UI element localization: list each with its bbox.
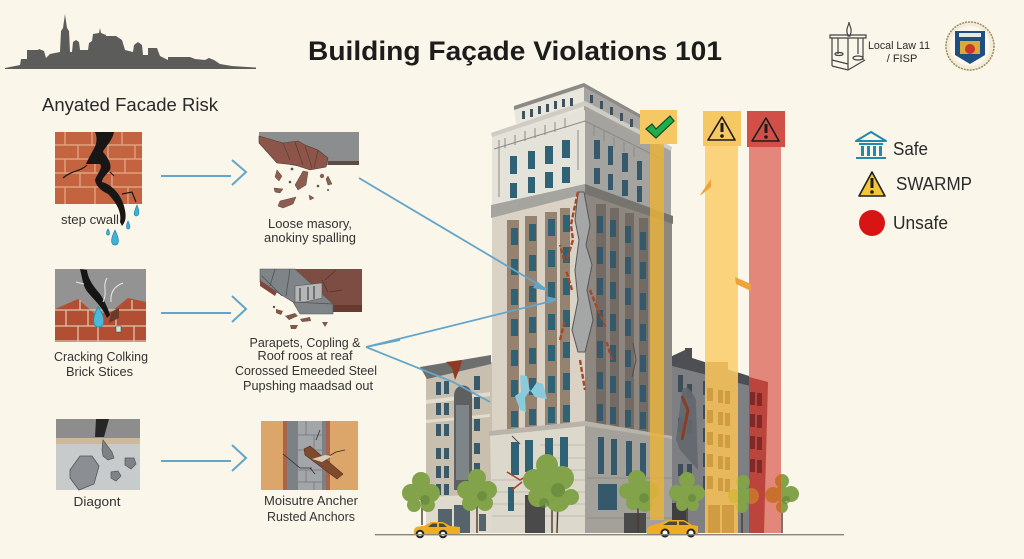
label: cracking [54, 350, 148, 379]
label: anchors [264, 494, 358, 524]
status bands over building [650, 144, 781, 533]
illustration: right neighbouring building [672, 348, 768, 533]
middle right [585, 192, 672, 438]
label: parapets: Roof roos at reaf [258, 349, 353, 363]
middle front [492, 192, 585, 433]
label: cracking: Brick Stices [66, 365, 133, 379]
label: diagonal: Diagont [74, 495, 121, 509]
label: loose masonry [264, 217, 356, 245]
arrow 2 [161, 296, 246, 322]
status icon: warning [703, 111, 741, 146]
label: parapets [235, 336, 377, 393]
label: anchors: Rusted Anchors [267, 510, 355, 524]
panel: cracking caulking brick icon [55, 269, 146, 342]
crack down the corner [572, 192, 593, 352]
logo: shield seal [946, 22, 994, 70]
arrow: parapet to left building [366, 347, 490, 402]
label: Local Law 11 / FISP [868, 40, 930, 65]
taxi right [647, 520, 698, 536]
status icon: danger [747, 111, 785, 147]
arrow: parapet to tower [366, 296, 558, 347]
tower entrance [525, 495, 646, 533]
label: loose masonry: anokiny spalling [264, 231, 356, 245]
illustration: left neighbouring building [420, 355, 492, 533]
label: Local Law 11 / FISP: Local Law 11 [868, 40, 930, 52]
heading: facade risk: Anyated Facade Risk [42, 94, 219, 115]
title: Building Façade Violations 101 [308, 36, 722, 66]
label: parapets: Pupshing maadsad out [243, 379, 374, 393]
trees tinted through the bands [728, 474, 781, 513]
label: parapets: Parapets, Copling & [250, 336, 361, 350]
arrow 1 [161, 160, 246, 185]
status icon: check [640, 110, 677, 144]
skyline icon [5, 14, 256, 69]
illustration: main tower [489, 83, 673, 533]
band: unsafe [749, 146, 781, 533]
panel: parapet icon [260, 269, 362, 329]
water stain [515, 375, 547, 412]
panel: diagonal crack spall icon [56, 419, 140, 490]
panel: loose masonry icon [259, 132, 359, 208]
ground line [375, 534, 844, 535]
label: Local Law 11 / FISP: / FISP [887, 53, 917, 65]
band: warning [705, 146, 738, 533]
label: loose masonry: Loose masory, [268, 217, 352, 231]
band: warning over neighbour [705, 362, 738, 533]
taxi left [414, 522, 460, 537]
label: parapets: Corossed Emeeded Steel [235, 364, 377, 378]
arrow: masonry to tower [359, 178, 548, 291]
legend [856, 132, 972, 236]
upper front [492, 102, 585, 205]
panel: rusted anchor icon [261, 421, 358, 490]
base front [490, 424, 585, 533]
logo: Local Law 11 scales icon [830, 22, 866, 70]
windows [508, 140, 570, 511]
label: step crack: step cwall [61, 213, 119, 227]
illustration: trees [402, 454, 799, 533]
label: cracking: Cracking Colking [54, 350, 148, 364]
penthouse [514, 84, 584, 124]
label: anchors: Moisutre Ancher [264, 494, 358, 508]
band: safe [650, 144, 664, 520]
mid cornice [491, 184, 585, 218]
band: unsafe over neighbour [749, 377, 768, 533]
upper right [585, 102, 671, 218]
panel: step crack brick icon [55, 132, 142, 245]
arrow 3 [161, 445, 246, 471]
legend: swarmp: SWARMP [896, 174, 972, 194]
legend: unsafe: Unsafe [893, 213, 948, 233]
legend: safe: Safe [893, 139, 928, 159]
